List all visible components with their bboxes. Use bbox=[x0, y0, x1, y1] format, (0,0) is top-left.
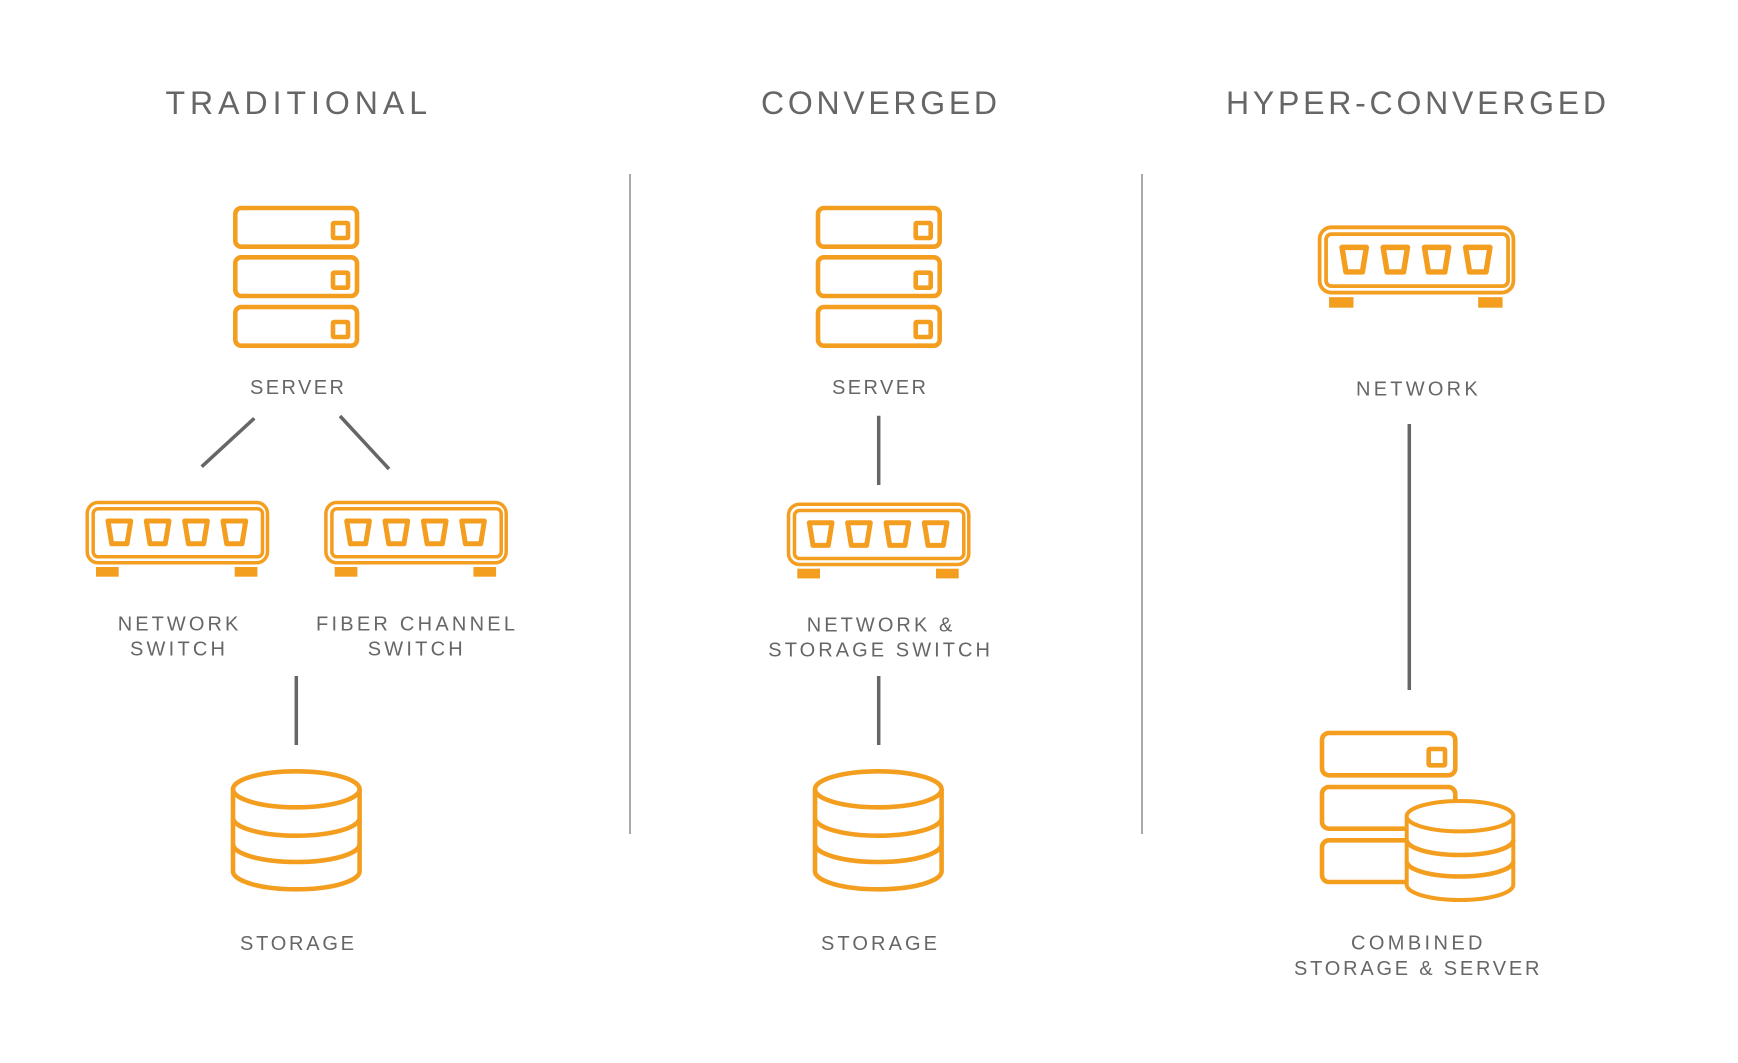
label: combined storage and server: COMBINED bbox=[1351, 932, 1482, 954]
label: network and storage switch: NETWORK & bbox=[807, 615, 953, 637]
label: fiber channel switch: FIBER CHANNEL bbox=[316, 614, 515, 636]
icon: server bbox=[818, 208, 940, 346]
panel: hyper-converged bbox=[1226, 85, 1606, 980]
connector: switches to storage bbox=[295, 676, 298, 745]
connector: server to fiber channel switch bbox=[340, 416, 389, 469]
icon: network bbox=[1320, 227, 1513, 308]
label: network switch: NETWORK bbox=[118, 614, 239, 636]
icon: fiber channel switch bbox=[326, 502, 506, 577]
label: fiber channel switch: SWITCH bbox=[368, 639, 463, 661]
panel: traditional bbox=[87, 85, 515, 955]
label: combined storage and server: STORAGE & SERVER bbox=[1294, 958, 1540, 980]
connector: server to network switch bbox=[202, 418, 254, 467]
icon: server bbox=[235, 208, 357, 346]
heading: converged: CONVERGED bbox=[761, 85, 997, 121]
label: server: SERVER bbox=[250, 377, 344, 399]
panel: converged bbox=[761, 85, 997, 955]
label: network: NETWORK bbox=[1356, 379, 1478, 401]
icon: combined storage and server bbox=[1322, 733, 1513, 900]
label: storage: STORAGE bbox=[240, 933, 354, 955]
heading: traditional: TRADITIONAL bbox=[166, 85, 427, 121]
label: network and storage switch bbox=[768, 615, 990, 662]
connector: network to combined bbox=[1408, 424, 1411, 690]
label: server: SERVER bbox=[832, 377, 926, 399]
divider: right bbox=[1141, 174, 1143, 834]
label: fiber channel switch bbox=[316, 614, 515, 661]
connector: switch to storage bbox=[877, 676, 880, 745]
icon: storage bbox=[815, 771, 942, 889]
icon: storage bbox=[233, 771, 360, 889]
label: combined storage and server bbox=[1294, 932, 1540, 980]
icon: network and storage switch bbox=[788, 504, 969, 578]
divider: left bbox=[629, 174, 631, 834]
icon: network switch bbox=[87, 502, 268, 577]
label: network switch bbox=[118, 614, 239, 661]
heading: hyper-converged: HYPER-CONVERGED bbox=[1226, 85, 1606, 121]
label: network switch: SWITCH bbox=[130, 639, 225, 661]
label: storage: STORAGE bbox=[821, 933, 937, 955]
connector: server to switch bbox=[877, 416, 880, 485]
label: network and storage switch: STORAGE SWITCH bbox=[768, 640, 990, 662]
